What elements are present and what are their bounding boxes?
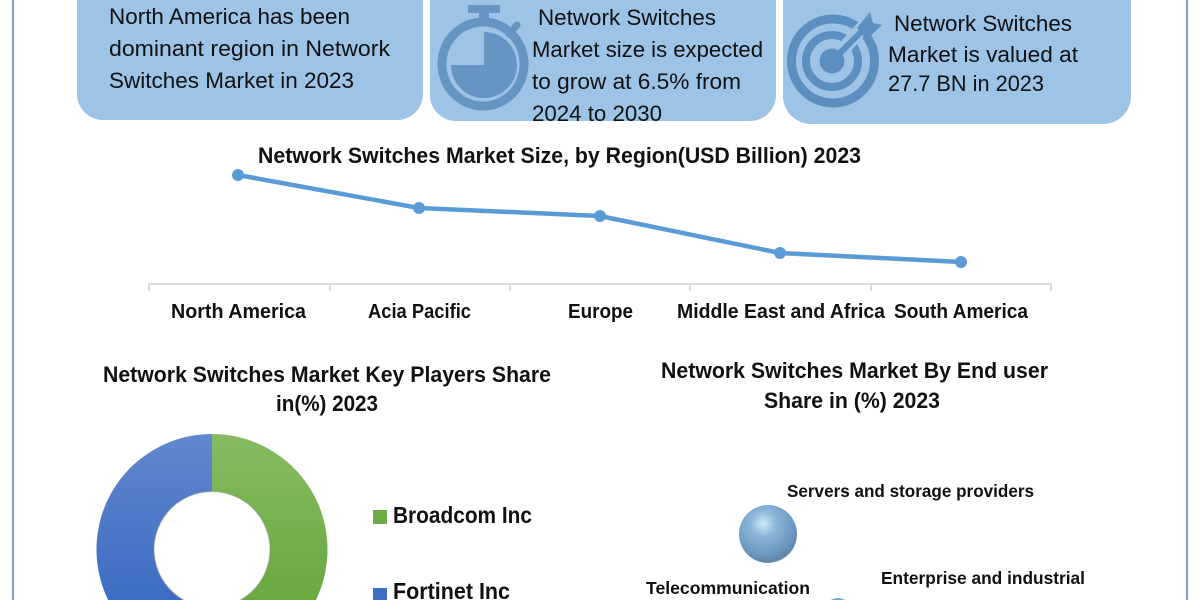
heading: key players — [103, 362, 551, 416]
data line — [232, 169, 967, 268]
heading: end user — [661, 358, 1048, 413]
axis labels: North America — [171, 301, 307, 323]
callout text: growth: 2024 to 2030 — [532, 101, 662, 126]
heading: end user: Network Switches Market By End user — [661, 358, 1048, 383]
heading: line chart: Network Switches Market Size, by Region(USD Billion) 2023 — [258, 143, 861, 168]
callout text: value: 27.7 BN in 2023 — [888, 71, 1044, 96]
axis labels: South America — [894, 301, 1029, 323]
axis labels: Middle East and Africa — [677, 301, 886, 323]
callout text: North America: Switches Market in 2023 — [109, 68, 354, 93]
callout text: value: Network Switches — [894, 11, 1072, 36]
icon: target with arrow — [792, 6, 882, 103]
axis labels — [171, 301, 1029, 323]
axis labels: Europe — [568, 301, 633, 323]
line chart: market size by region — [149, 169, 1051, 323]
callout text: value: Market is valued at — [888, 42, 1079, 67]
callout text: growth: to grow at 6.5% from — [532, 69, 741, 94]
bubble chart: end user share — [646, 481, 1085, 600]
callout text: growth: Network Switches — [538, 5, 716, 30]
callout text: North America — [109, 4, 391, 93]
icon: stopwatch — [442, 5, 524, 106]
axis — [149, 284, 1051, 291]
donut chart: key players share — [96, 434, 328, 600]
label: servers: Servers and storage providers — [787, 481, 1034, 501]
panel: growth callout — [430, 0, 776, 126]
legend: key players: Broadcom Inc — [393, 502, 532, 528]
callout text: growth: Market size is expected — [532, 37, 763, 62]
heading: end user: Share in (%) 2023 — [764, 388, 940, 413]
heading: key players: Network Switches Market Key Players Share — [103, 362, 551, 387]
panel: dominant region callout — [77, 0, 423, 120]
heading: key players: in(%) 2023 — [276, 391, 378, 416]
legend: key players — [373, 502, 532, 600]
bubble: servers — [739, 505, 797, 563]
label: telecommunication: Telecommunication — [646, 578, 810, 598]
callout text: North America: North America has been — [109, 4, 350, 29]
panel: market value callout — [783, 0, 1131, 124]
label: enterprise: Enterprise and industrial — [881, 568, 1085, 588]
callout text: value — [888, 11, 1079, 96]
callout text: growth — [532, 5, 763, 126]
callout text: North America: dominant region in Network — [109, 36, 391, 61]
axis labels: Acia Pacific — [368, 301, 471, 323]
bubble: partial — [831, 598, 845, 600]
